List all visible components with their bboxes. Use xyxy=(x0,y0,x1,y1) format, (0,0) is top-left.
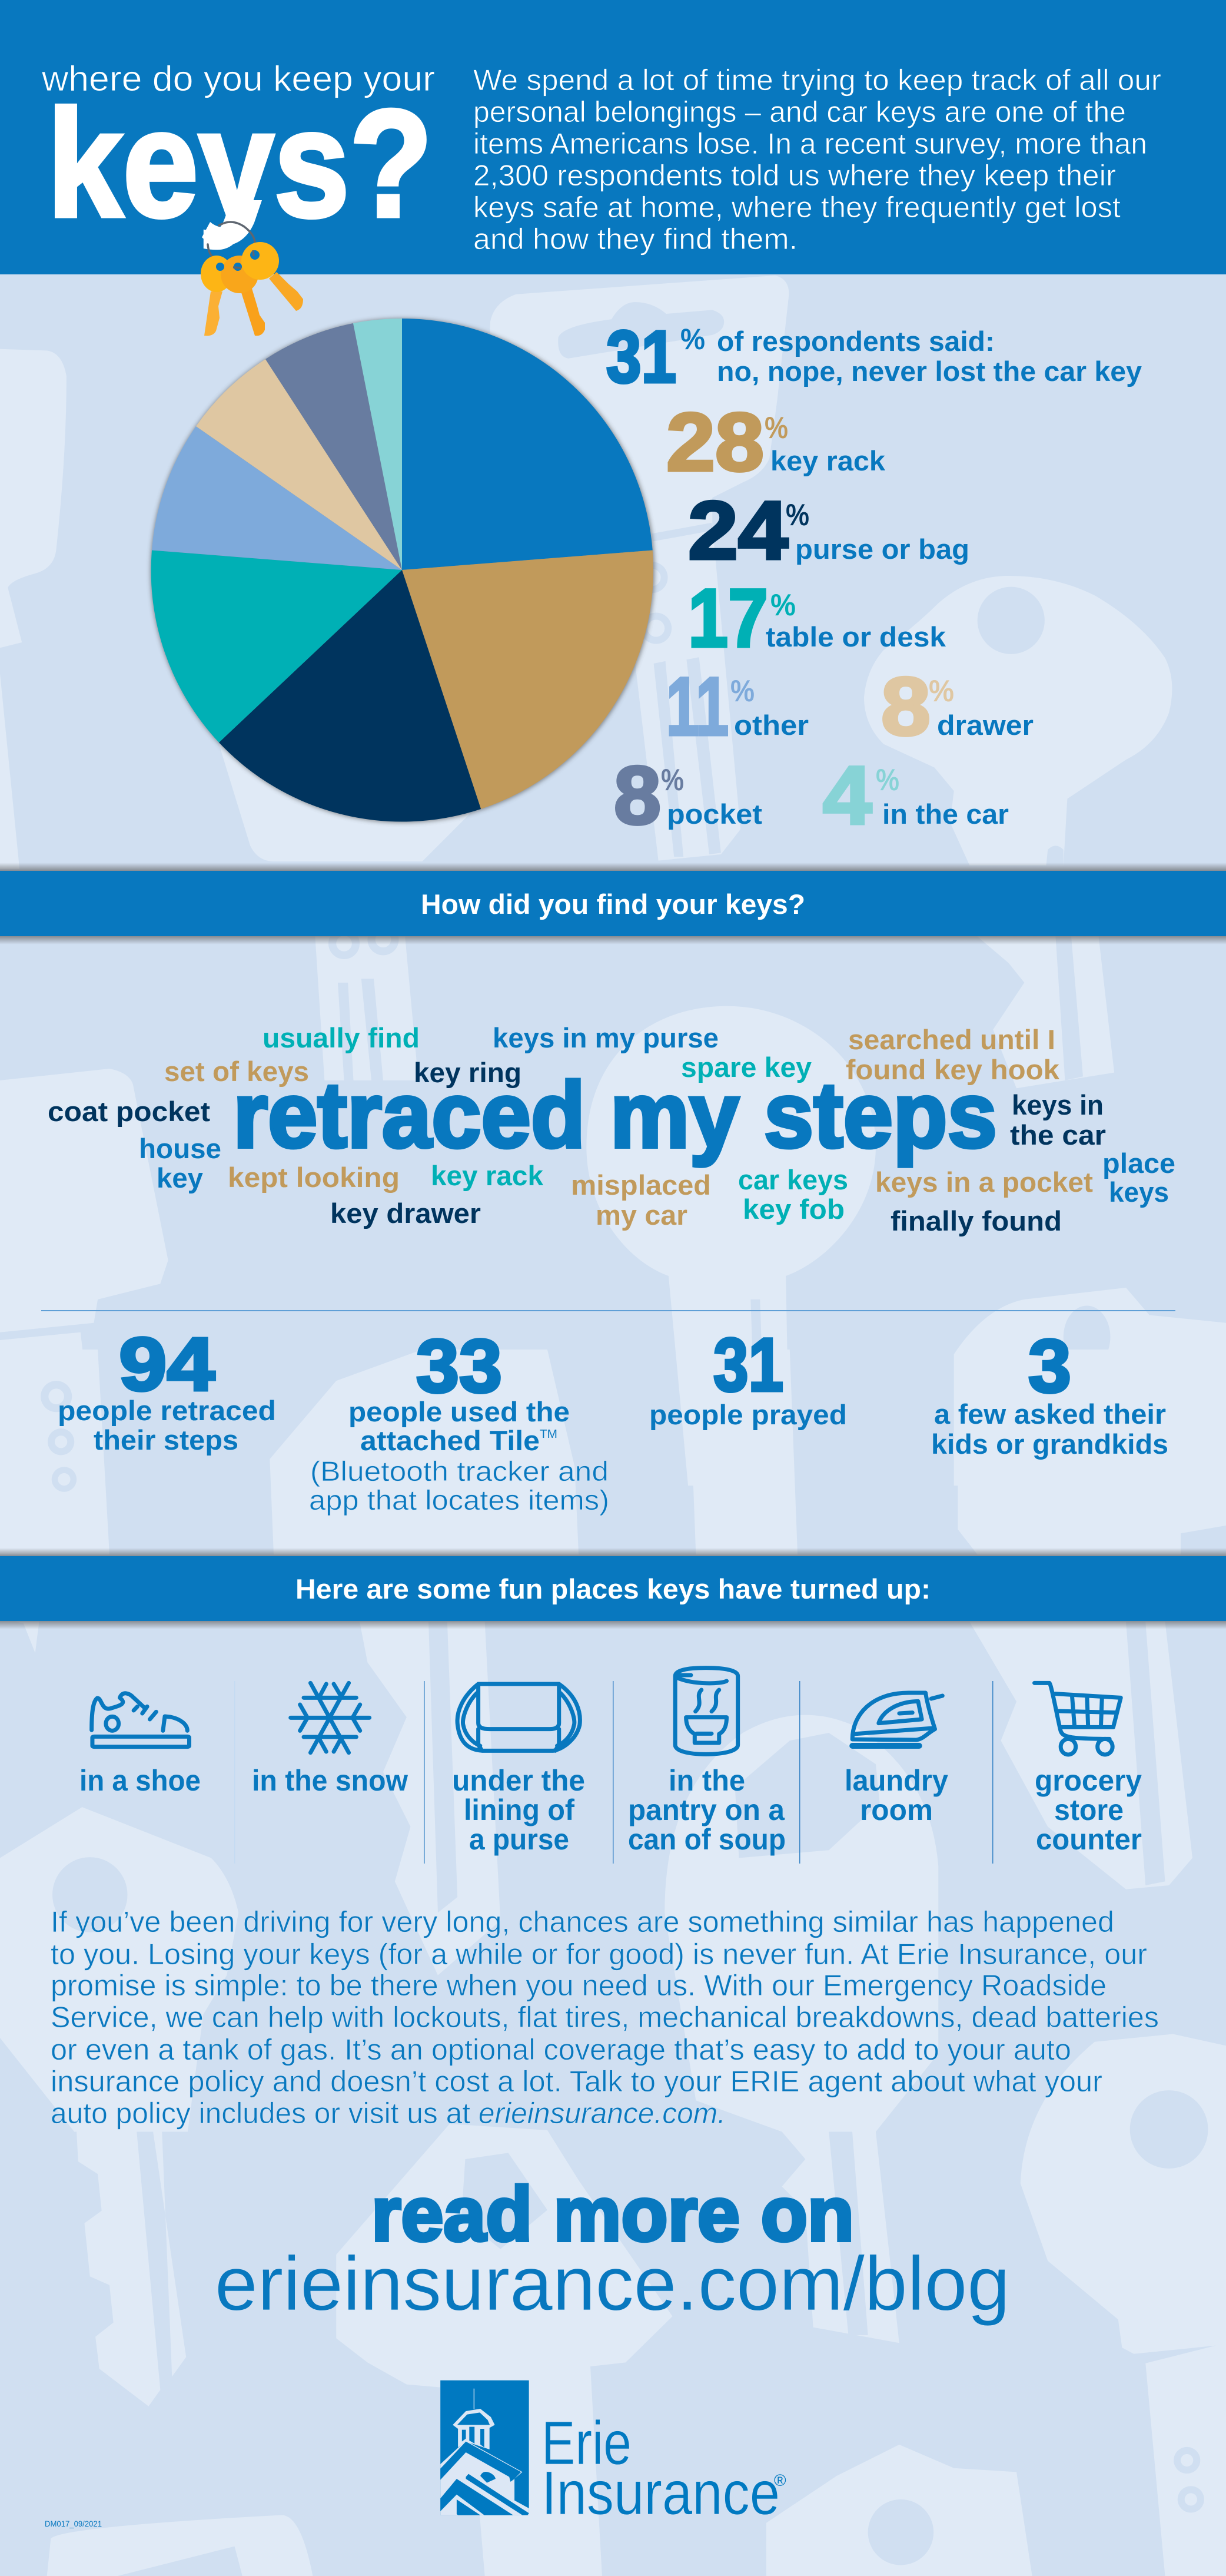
stat: 94 retraced: their steps xyxy=(94,1424,238,1456)
icon: iron xyxy=(852,1693,942,1746)
icon: shoe xyxy=(92,1693,189,1747)
title small line: where do you keep your xyxy=(41,59,435,98)
word cloud: key xyxy=(157,1162,203,1193)
stat: 33 tile: attached Tile xyxy=(360,1425,540,1456)
stat: other: 11 xyxy=(666,660,729,752)
word cloud: misplaced xyxy=(571,1169,711,1201)
stat: purse or bag: 24 xyxy=(688,484,788,576)
stat: 94 retraced xyxy=(58,1322,276,1456)
title keys: keys? xyxy=(47,78,433,250)
stat: 33 tile: 33 xyxy=(416,1324,502,1408)
word cloud: coat pocket xyxy=(48,1096,210,1127)
word cloud: retraced my steps xyxy=(233,1063,997,1167)
word cloud: finally found xyxy=(891,1205,1062,1236)
word cloud: my car xyxy=(596,1199,687,1231)
icon: purse xyxy=(457,1684,580,1751)
closing paragraph: to you. Losing your keys (for a while or for good) is never fun. At Erie Insurance, our xyxy=(51,1938,1147,1971)
word cloud: key drawer xyxy=(330,1198,481,1229)
stat: 31 prayed xyxy=(649,1323,847,1430)
closing paragraph: auto policy includes or visit us at erieinsurance.com. xyxy=(51,2097,726,2130)
intro paragraph: personal belongings – and car keys are one of the xyxy=(473,95,1126,128)
logo mark xyxy=(440,2381,529,2515)
background key pattern, upper xyxy=(0,276,1226,1486)
icon labels: under the xyxy=(452,1764,585,1797)
word cloud: key fob xyxy=(743,1193,845,1225)
stat: 94 retraced: 94 xyxy=(119,1322,215,1407)
stat: purse or bag xyxy=(688,484,969,576)
stat: 94 retraced: people retraced xyxy=(58,1395,276,1426)
stat: drawer: drawer xyxy=(937,710,1034,741)
stat: key rack: key rack xyxy=(770,445,886,476)
icon labels: pantry on a xyxy=(628,1793,785,1826)
section band: how did you find your keys xyxy=(0,863,1226,944)
closing paragraph: If you’ve been driving for very long, chances are something similar has happened xyxy=(51,1905,1114,1938)
stat: drawer xyxy=(881,660,1034,752)
word cloud: place xyxy=(1102,1148,1175,1179)
word cloud: key rack xyxy=(431,1160,544,1191)
stat: pocket: % xyxy=(661,763,684,797)
stat: 33 tile: app that locates items) xyxy=(309,1484,609,1516)
intro paragraph: and how they find them. xyxy=(473,223,798,256)
stat: 3 kids: kids or grandkids xyxy=(931,1428,1168,1460)
stat: purse or bag: % xyxy=(786,498,809,532)
stat: table or desk xyxy=(688,572,946,664)
stat: drawer: 8 xyxy=(881,660,931,752)
stat: 31 prayed: people prayed xyxy=(649,1399,847,1430)
stat: 33 tile: TM xyxy=(540,1428,557,1441)
stat: in the car: in the car xyxy=(882,798,1009,830)
stat: 31 prayed: 31 xyxy=(713,1323,783,1407)
icon: snowflake xyxy=(291,1683,370,1753)
stat: other: % xyxy=(730,674,755,708)
section band: fun places: Here are some fun places keys have turned up: xyxy=(295,1573,931,1604)
intro paragraph: 2,300 respondents told us where they keep their xyxy=(473,159,1116,192)
intro paragraph: keys safe at home, where they frequently get lost xyxy=(473,191,1121,224)
icon: shopping cart xyxy=(1035,1683,1121,1755)
closing paragraph: insurance policy and doesn’t cost a lot. Talk to your ERIE agent about what your xyxy=(51,2065,1102,2098)
stat: other xyxy=(666,660,809,752)
stat: table or desk: table or desk xyxy=(766,621,946,652)
icon labels xyxy=(79,1764,1142,1856)
stat: 33 tile xyxy=(309,1324,609,1516)
job code: DM017_09/2021 xyxy=(45,2519,102,2528)
stat: 3 kids xyxy=(931,1324,1168,1460)
word cloud: the car xyxy=(1010,1119,1106,1151)
stat: never lost: 31 xyxy=(606,316,676,398)
call to action: erieinsurance.com/blog xyxy=(215,2240,1010,2326)
logo: Erie Insurance xyxy=(440,2381,786,2528)
column separators xyxy=(234,1681,994,1864)
icon labels: laundry xyxy=(845,1764,948,1797)
word cloud: usually find xyxy=(263,1022,420,1053)
header panel xyxy=(0,0,1226,274)
logo: Erie Insurance: Insurance xyxy=(541,2459,780,2528)
word cloud: spare key xyxy=(681,1052,812,1083)
word cloud: keys in xyxy=(1012,1089,1104,1120)
icon labels: lining of xyxy=(464,1793,574,1826)
stat: in the car: 4 xyxy=(823,749,872,841)
icon labels: counter xyxy=(1036,1823,1142,1856)
icon labels: a purse xyxy=(469,1823,569,1856)
word cloud: searched until I xyxy=(848,1024,1055,1055)
icon labels: in a shoe xyxy=(79,1764,201,1797)
closing paragraph xyxy=(51,1905,1159,2130)
stat: purse or bag: purse or bag xyxy=(795,533,969,565)
icon labels: store xyxy=(1054,1793,1124,1826)
stat: in the car: % xyxy=(876,763,899,797)
stat: key rack xyxy=(666,396,886,488)
section band: how did you find your keys: How did you find your keys? xyxy=(421,888,805,920)
background key pattern, lower xyxy=(0,1350,1226,2576)
pie chart xyxy=(151,319,654,823)
logo: Erie Insurance: Erie xyxy=(541,2409,632,2478)
word cloud xyxy=(48,1022,1175,1236)
stat: 33 tile: people used the xyxy=(348,1396,570,1427)
word cloud: keys in a pocket xyxy=(875,1166,1093,1198)
icon labels: grocery xyxy=(1035,1764,1142,1797)
stat: pocket xyxy=(614,749,762,841)
intro paragraph xyxy=(473,64,1161,256)
stat: never lost: of respondents said: xyxy=(717,326,995,357)
stat: key rack: % xyxy=(765,411,788,445)
closing paragraph: Service, we can help with lockouts, flat tires, mechanical breakdowns, dead batteries xyxy=(51,2001,1159,2034)
icon labels: in the xyxy=(669,1764,745,1797)
call to action: read more on xyxy=(371,2171,854,2257)
stat: 33 tile: (Bluetooth tracker and xyxy=(310,1456,609,1487)
closing paragraph: promise is simple: to be there when you need us. With our Emergency Roadside xyxy=(51,1969,1107,2002)
word cloud: keys xyxy=(1109,1176,1169,1208)
stat: never lost: % xyxy=(680,323,705,356)
stat: 3 kids: 3 xyxy=(1028,1324,1071,1408)
icon labels: room xyxy=(860,1793,933,1826)
word cloud: kept looking xyxy=(228,1162,400,1193)
stat: drawer: % xyxy=(929,674,954,708)
stat: in the car xyxy=(823,749,1009,841)
word cloud: set of keys xyxy=(164,1056,309,1087)
stat: pocket: 8 xyxy=(614,749,661,841)
stat: never lost: no, nope, never lost the car key xyxy=(717,356,1142,387)
word cloud: car keys xyxy=(738,1164,848,1195)
intro paragraph: We spend a lot of time trying to keep track of all our xyxy=(473,64,1161,97)
icon labels: can of soup xyxy=(628,1823,786,1856)
icon: key ring with keys xyxy=(201,200,303,336)
logo: Erie Insurance: ® xyxy=(774,2471,786,2489)
icon labels: in the snow xyxy=(252,1764,408,1797)
intro paragraph: items Americans lose. In a recent survey, more than xyxy=(473,127,1147,160)
word cloud: keys in my purse xyxy=(493,1022,719,1053)
stat: table or desk: % xyxy=(770,588,796,622)
section band: fun places xyxy=(0,1548,1226,1629)
stat: never lost xyxy=(606,316,1142,398)
stat: pocket: pocket xyxy=(667,798,762,830)
word cloud: found key hook xyxy=(846,1054,1060,1085)
stat: 3 kids: a few asked their xyxy=(934,1398,1166,1430)
word cloud: house xyxy=(139,1133,221,1164)
word cloud: key ring xyxy=(414,1057,521,1088)
icon: soup can xyxy=(675,1668,738,1754)
stat: table or desk: 17 xyxy=(688,572,768,664)
stat: other: other xyxy=(734,710,809,741)
stat: key rack: 28 xyxy=(666,396,764,488)
call to action xyxy=(215,2171,1010,2326)
closing paragraph: or even a tank of gas. It’s an optional coverage that’s easy to add to your auto xyxy=(51,2033,1071,2066)
